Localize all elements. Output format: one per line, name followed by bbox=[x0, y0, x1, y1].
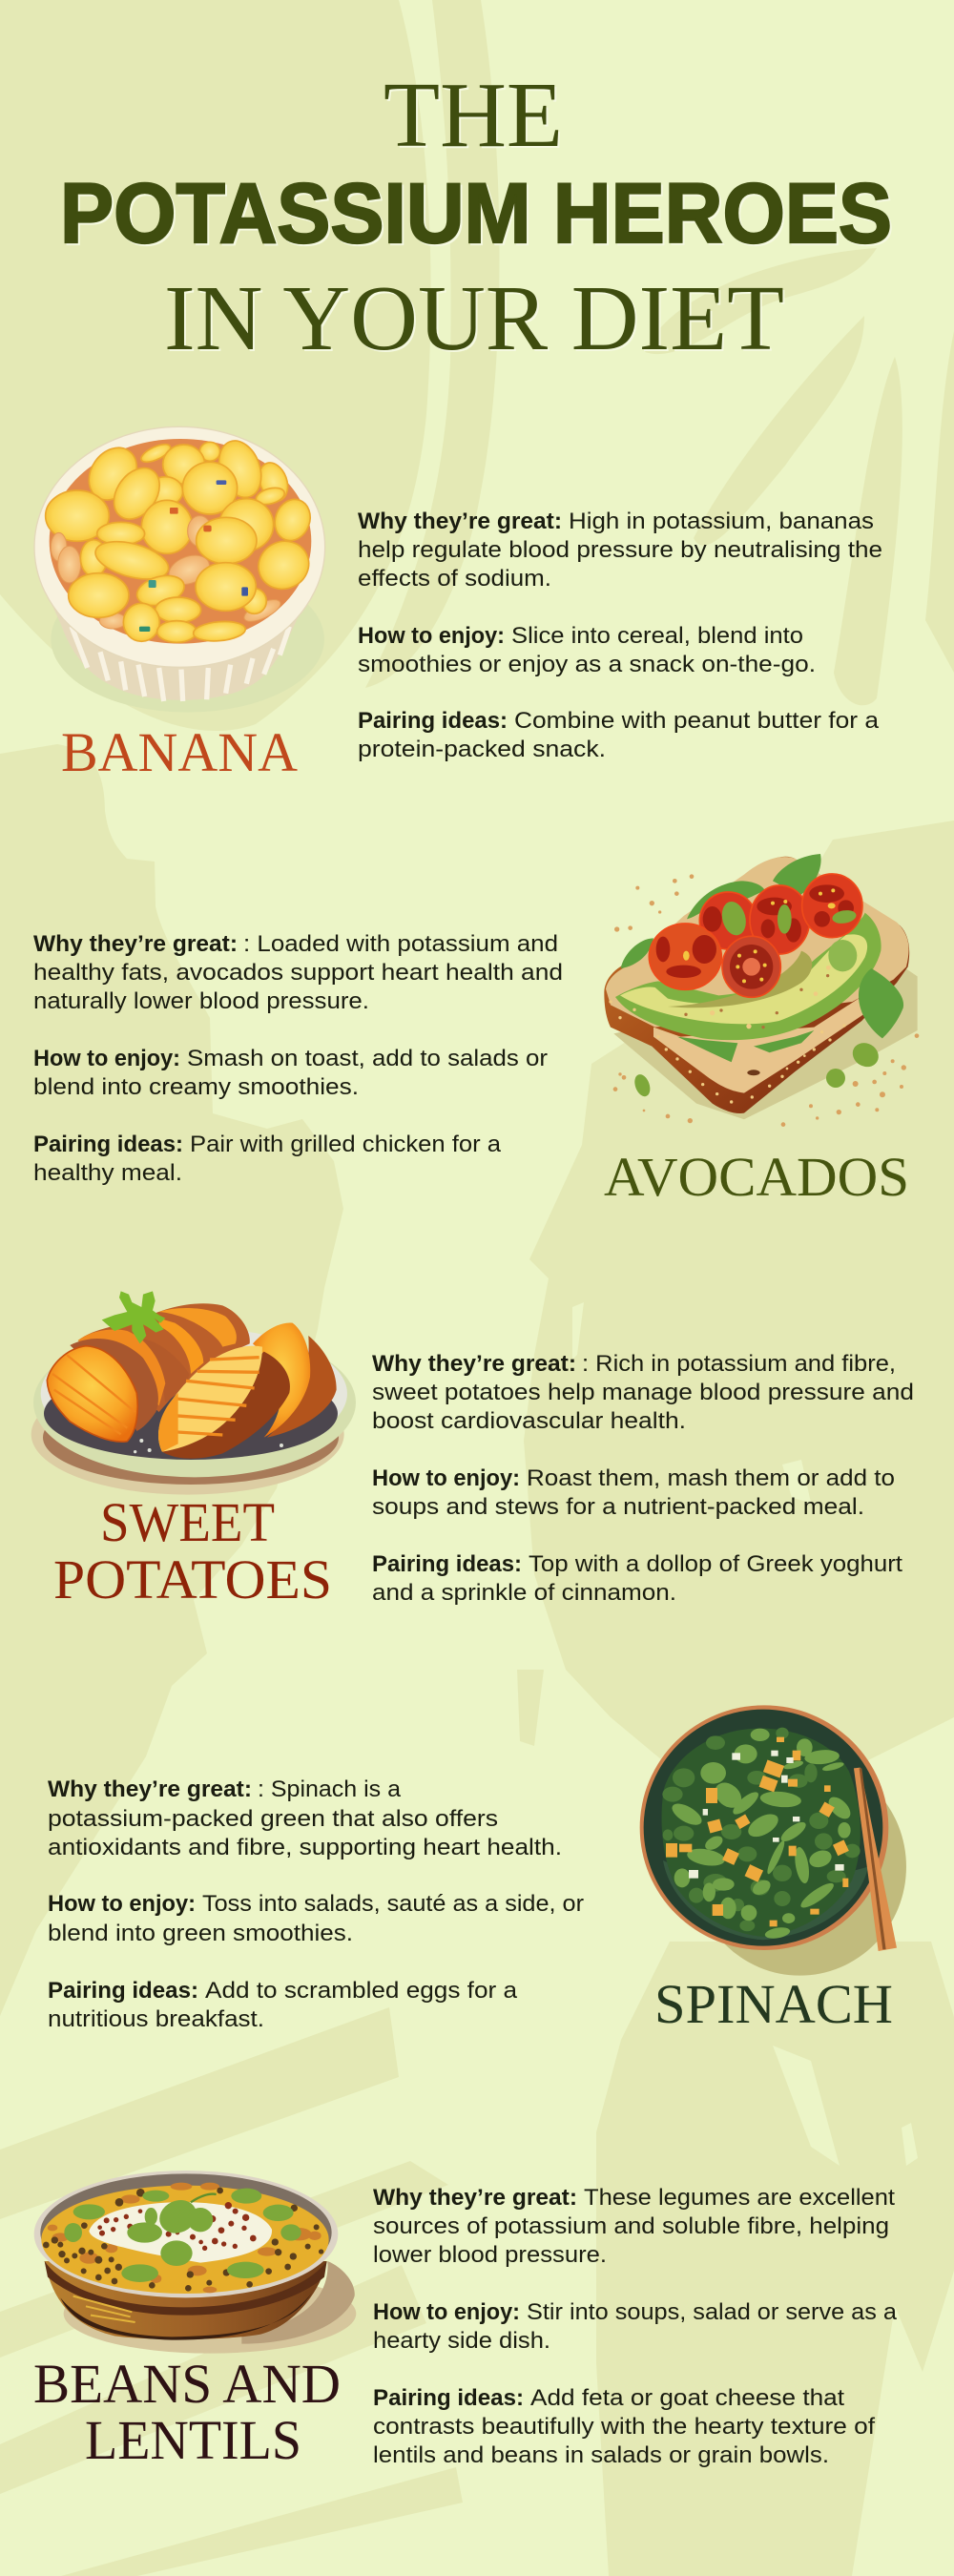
text: avocados details: naturally lower blood pressure. bbox=[33, 988, 369, 1014]
text: sweet potatoes details: Roast them, mash them or add to bbox=[527, 1465, 895, 1491]
heading: spinach: SPINACH bbox=[654, 1973, 893, 2035]
text: spinach details bbox=[48, 1776, 584, 2032]
text: banana details: Why they’re great: bbox=[358, 509, 562, 534]
text: spinach details: blend into green smoothies. bbox=[48, 1921, 353, 1946]
heading: beans and lentils bbox=[33, 2353, 341, 2471]
heading: avocados: AVOCADOS bbox=[604, 1146, 909, 1208]
illustration: banana bowl bbox=[34, 426, 325, 713]
text: spinach details: : Spinach is a bbox=[258, 1776, 402, 1802]
title: THE bbox=[384, 64, 563, 167]
background light streaks bbox=[572, 1302, 918, 2166]
text: spinach details: How to enjoy: bbox=[48, 1891, 196, 1917]
text: beans and lentils details: sources of potassium and soluble fibre, helping bbox=[373, 2213, 889, 2239]
text: sweet potatoes details: Top with a dollop of Greek yoghurt bbox=[529, 1551, 902, 1577]
title: POTASSIUM HEROES bbox=[60, 165, 892, 260]
text: banana details: help regulate blood pressure by neutralising the bbox=[358, 537, 882, 563]
text: avocados details: How to enjoy: bbox=[33, 1046, 180, 1071]
text: banana details: How to enjoy: bbox=[358, 623, 505, 649]
text: banana details: smoothies or enjoy as a snack on-the-go. bbox=[358, 652, 816, 677]
heading: banana: BANANA bbox=[61, 721, 298, 783]
text: spinach details: Why they’re great: bbox=[48, 1776, 252, 1802]
text: spinach details: Add to scrambled eggs for a bbox=[205, 1978, 518, 2004]
text: sweet potatoes details: sweet potatoes help manage blood pressure and bbox=[372, 1380, 914, 1405]
text: avocados details: blend into creamy smoothies. bbox=[33, 1074, 359, 1100]
text: beans and lentils details: Why they’re great: bbox=[373, 2185, 577, 2211]
text: banana details: protein-packed snack. bbox=[358, 737, 606, 762]
text: avocados details: healthy fats, avocados support heart health and bbox=[33, 960, 563, 986]
text: avocados details: : Loaded with potassium and bbox=[243, 931, 558, 957]
panel: spinach bbox=[48, 1705, 906, 2035]
text: beans and lentils details: These legumes are excellent bbox=[584, 2185, 895, 2211]
text: spinach details: Toss into salads, sauté as a side, or bbox=[202, 1891, 584, 1917]
text: avocados details: healthy meal. bbox=[33, 1160, 182, 1186]
text: spinach details: nutritious breakfast. bbox=[48, 2006, 264, 2032]
text: sweet potatoes details: boost cardiovascular health. bbox=[372, 1408, 686, 1434]
text: banana details: High in potassium, bananas bbox=[569, 509, 874, 534]
text: banana details: Slice into cereal, blend into bbox=[511, 623, 803, 649]
text: beans and lentils details: lower blood pressure. bbox=[373, 2242, 607, 2268]
text: sweet potatoes details: soups and stews for a nutrient-packed meal. bbox=[372, 1494, 864, 1520]
text: banana details bbox=[358, 509, 882, 762]
text: avocados details: Why they’re great: bbox=[33, 931, 238, 957]
illustration: avocado toast bbox=[604, 854, 919, 1127]
text: avocados details: Smash on toast, add to salads or bbox=[187, 1046, 548, 1071]
illustration: lentil bowl bbox=[34, 2171, 356, 2354]
text: beans and lentils details: lentils and beans in salads or grain bowls. bbox=[373, 2442, 829, 2468]
illustration: spinach bowl bbox=[640, 1705, 906, 1976]
heading: sweet potatoes bbox=[53, 1491, 332, 1610]
heading: sweet potatoes: SWEET bbox=[100, 1491, 275, 1553]
title: IN YOUR DIET bbox=[164, 267, 784, 370]
panel: beans and lentils bbox=[33, 2171, 898, 2471]
text: banana details: effects of sodium. bbox=[358, 566, 551, 592]
text: sweet potatoes details bbox=[372, 1351, 914, 1606]
text: sweet potatoes details: : Rich in potassium and fibre, bbox=[582, 1351, 896, 1377]
text: beans and lentils details: contrasts beautifully with the hearty texture of bbox=[373, 2414, 875, 2440]
text: beans and lentils details bbox=[373, 2185, 898, 2468]
title bbox=[60, 64, 892, 370]
text: avocados details bbox=[33, 931, 563, 1186]
panel: sweet potatoes bbox=[31, 1291, 914, 1610]
heading: beans and lentils: LENTILS bbox=[85, 2409, 301, 2471]
text: beans and lentils details: Stir into soups, salad or serve as a bbox=[527, 2299, 898, 2325]
text: beans and lentils details: How to enjoy: bbox=[373, 2299, 520, 2325]
heading: sweet potatoes: POTATOES bbox=[53, 1548, 332, 1610]
panel: avocados bbox=[33, 854, 919, 1208]
text: banana details: Combine with peanut butter for a bbox=[514, 708, 880, 734]
text: avocados details: Pairing ideas: bbox=[33, 1132, 183, 1157]
text: beans and lentils details: hearty side dish. bbox=[373, 2328, 550, 2354]
text: spinach details: antioxidants and fibre, supporting heart health. bbox=[48, 1835, 562, 1860]
text: sweet potatoes details: Why they’re great: bbox=[372, 1351, 576, 1377]
text: banana details: Pairing ideas: bbox=[358, 708, 508, 734]
text: beans and lentils details: Pairing ideas: bbox=[373, 2385, 524, 2411]
text: spinach details: potassium-packed green that also offers bbox=[48, 1806, 498, 1832]
heading: beans and lentils: BEANS AND bbox=[33, 2353, 341, 2415]
illustration: sweet potatoes on plate bbox=[31, 1291, 356, 1495]
text: sweet potatoes details: Pairing ideas: bbox=[372, 1551, 522, 1577]
text: beans and lentils details: Add feta or goat cheese that bbox=[530, 2385, 844, 2411]
text: sweet potatoes details: and a sprinkle of cinnamon. bbox=[372, 1580, 676, 1606]
text: spinach details: Pairing ideas: bbox=[48, 1978, 198, 2004]
panel: banana bbox=[34, 426, 882, 783]
text: sweet potatoes details: How to enjoy: bbox=[372, 1465, 520, 1491]
text: avocados details: Pair with grilled chicken for a bbox=[190, 1132, 502, 1157]
